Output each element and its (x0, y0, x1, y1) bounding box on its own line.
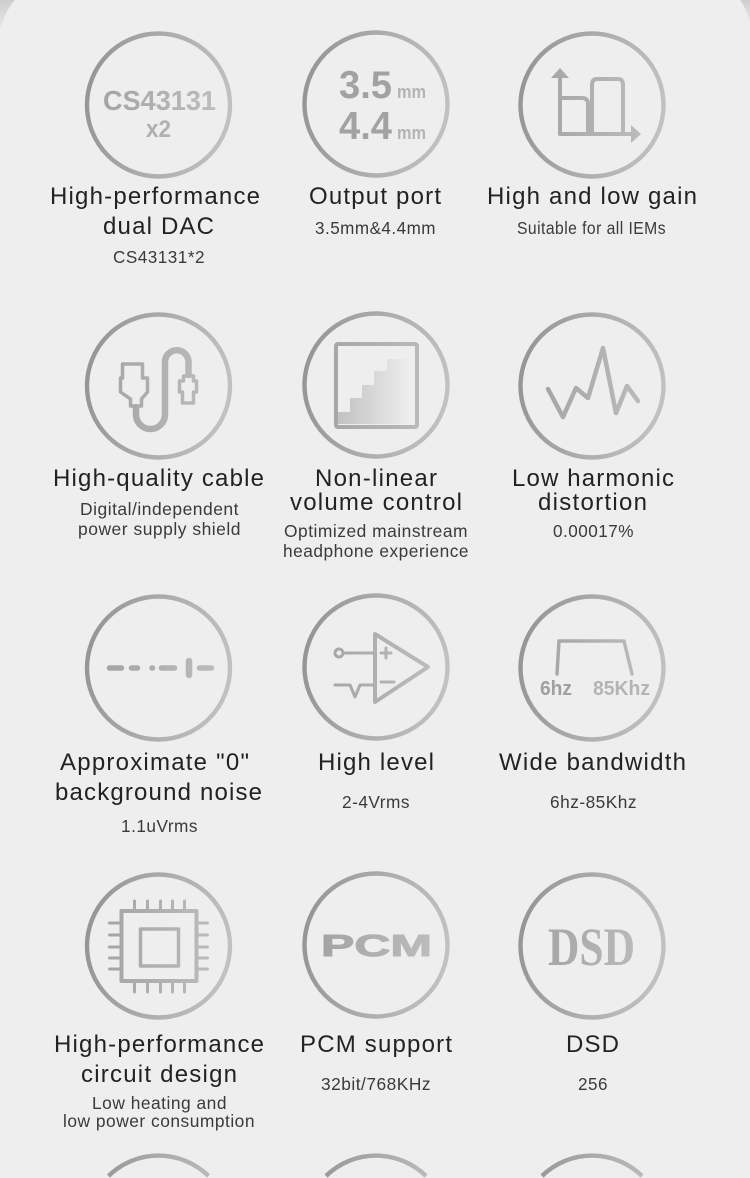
feature: high level (304, 596, 448, 812)
heading: distortion (538, 489, 647, 516)
partial ring: next row left (108, 1156, 208, 1176)
feature: wide bandwidth (499, 596, 686, 812)
heading: DSD (566, 1031, 619, 1058)
heading: Non-linear (315, 465, 437, 492)
icon: CS43131 x2 badge (87, 34, 230, 176)
icon: cable (87, 314, 230, 458)
icon: PCM (304, 874, 448, 1016)
icon: frequency band: 85Khz (593, 678, 650, 700)
icon: CS43131 x2 badge: x2 (146, 116, 171, 143)
heading: High-performance (54, 1031, 264, 1058)
feature: low harmonic distortion (512, 314, 674, 541)
top-right panel corner (740, 0, 750, 24)
subtext (283, 521, 469, 561)
icon: DSD: DSD (548, 917, 635, 977)
subtext (78, 499, 241, 539)
subtext: 6hz-85Khz (550, 792, 637, 812)
heading: dual DAC (103, 213, 214, 240)
subtext: 2-4Vrms (342, 792, 410, 812)
subtext: 0.00017% (553, 521, 634, 541)
feature: high and low gain (487, 34, 697, 238)
subtext: 3.5mm&4.4mm (315, 218, 436, 238)
icon: chip (87, 874, 230, 1018)
icon: 3.5mm and 4.4mm: 4.4 (339, 105, 392, 148)
subtext: 32bit/768KHz (321, 1074, 431, 1094)
heading: volume control (290, 489, 462, 516)
subtext: Suitable for all IEMs (517, 218, 666, 238)
heading: Output port (309, 183, 441, 210)
subtext: headphone experience (283, 541, 469, 561)
subtext: 1.1uVrms (121, 816, 198, 836)
feature: high-performance circuit design (54, 874, 264, 1131)
heading (290, 465, 462, 516)
feature: PCM support (300, 874, 452, 1094)
subtext: CS43131*2 (113, 247, 205, 267)
heading: Wide bandwidth (499, 749, 686, 776)
heading: background noise (55, 779, 262, 806)
partial ring: next row centre (326, 1156, 426, 1176)
heading (50, 183, 260, 240)
icon: noise dashes (87, 596, 230, 740)
icon: op-amp (304, 596, 448, 738)
heading: circuit design (81, 1061, 237, 1088)
icon: frequency band: 6hz (540, 678, 572, 700)
feature: approximate 0 background noise (55, 596, 262, 836)
heading (55, 749, 262, 806)
heading: PCM support (300, 1031, 452, 1058)
heading: High-performance (50, 183, 260, 210)
icon: waveform (520, 314, 664, 458)
feature: high-quality cable (53, 314, 264, 539)
icon: gain bar chart (520, 34, 664, 176)
icon: volume staircase (304, 314, 448, 456)
icon: 3.5mm and 4.4mm: mm (397, 123, 426, 143)
icon: 3.5mm and 4.4mm (304, 32, 448, 176)
feature: DSD (520, 874, 664, 1094)
subtext: power supply shield (78, 519, 241, 539)
heading: High level (318, 749, 434, 776)
feature: high-performance dual DAC (50, 34, 260, 267)
icon: 3.5mm and 4.4mm: 3.5 (339, 64, 392, 107)
heading: Low harmonic (512, 465, 674, 492)
subtext (63, 1093, 255, 1131)
partial ring: next row right (542, 1156, 642, 1176)
feature: output port (304, 32, 448, 238)
icon: frequency band (520, 596, 664, 740)
subtext: Digital/independent (80, 499, 239, 519)
subtext: 256 (578, 1074, 608, 1094)
heading: Approximate "0" (60, 749, 249, 776)
top-left panel corner (0, 0, 15, 32)
icon: PCM: PCM (321, 928, 432, 963)
heading (54, 1031, 264, 1088)
icon: DSD (520, 874, 664, 1018)
feature: non-linear volume control (283, 314, 469, 561)
icon: CS43131 x2 badge: CS43131 (103, 85, 216, 116)
icon: 3.5mm and 4.4mm: mm (397, 82, 426, 102)
subtext: Low heating and (92, 1093, 227, 1113)
heading: High-quality cable (53, 465, 264, 492)
heading (512, 465, 674, 516)
heading: High and low gain (487, 183, 697, 210)
subtext: low power consumption (63, 1111, 255, 1131)
subtext: Optimized mainstream (284, 521, 468, 541)
